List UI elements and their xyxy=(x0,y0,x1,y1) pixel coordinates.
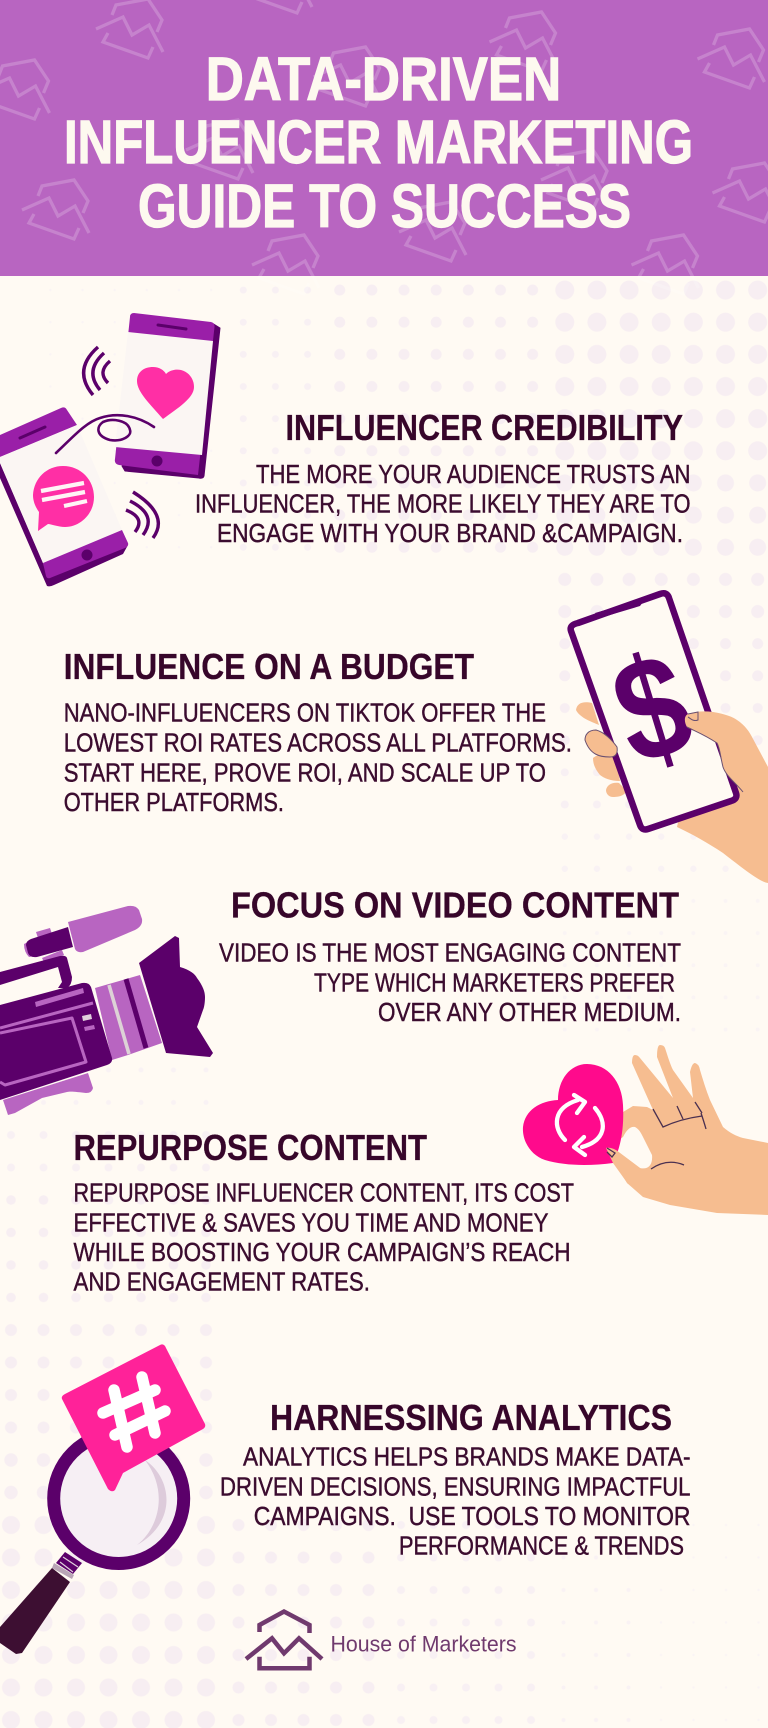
body text: WHILE BOOSTING YOUR CAMPAIGN’S REACH xyxy=(74,1237,570,1267)
heading: FOCUS ON VIDEO CONTENT xyxy=(231,885,679,926)
hashtag xyxy=(103,1377,165,1447)
body text: PERFORMANCE & TRENDS xyxy=(399,1531,684,1561)
icon: hand holding heart with recycle arrows xyxy=(523,1045,768,1215)
body text xyxy=(64,698,572,817)
body text: REPURPOSE INFLUENCER CONTENT, ITS COST xyxy=(74,1178,574,1208)
title: GUIDE TO SUCCESS xyxy=(138,172,631,240)
squiggle xyxy=(56,415,154,453)
handle xyxy=(0,956,72,988)
panel: focus on video content xyxy=(0,885,681,1115)
hand back xyxy=(677,712,768,883)
icon: two phones with heart and chat xyxy=(0,313,220,586)
body text: START HERE, PROVE ROI, AND SCALE UP TO xyxy=(64,757,546,787)
magnifier handle xyxy=(0,1552,82,1654)
body text: OVER ANY OTHER MEDIUM. xyxy=(378,997,681,1027)
panel: influencer credibility xyxy=(0,313,690,586)
body text: DRIVEN DECISIONS, ENSURING IMPACTFUL xyxy=(220,1471,690,1501)
body text: ANALYTICS HELPS BRANDS MAKE DATA- xyxy=(243,1442,690,1472)
phone notch xyxy=(595,598,646,618)
lens barrel xyxy=(95,975,162,1060)
body text: ENGAGE WITH YOUR BRAND &CAMPAIGN. xyxy=(217,518,683,548)
icon: video camera xyxy=(0,906,213,1115)
body text: EFFECTIVE & SAVES YOU TIME AND MONEY xyxy=(74,1207,548,1237)
body text xyxy=(74,1178,574,1297)
dollar sign: $ xyxy=(595,620,709,796)
heading: INFLUENCE ON A BUDGET xyxy=(64,646,474,687)
body text: LOWEST ROI RATES ACROSS ALL PLATFORMS. xyxy=(64,728,572,758)
hand outline xyxy=(687,712,743,792)
left phone xyxy=(0,407,128,586)
heart xyxy=(523,1064,623,1165)
panel: repurpose content xyxy=(74,1045,768,1297)
chat bubble xyxy=(33,466,94,531)
heading: HARNESSING ANALYTICS xyxy=(270,1397,672,1438)
phone xyxy=(571,593,736,830)
signal waves xyxy=(84,347,158,538)
footer logo xyxy=(246,1612,516,1668)
camera body xyxy=(0,983,112,1100)
title xyxy=(64,45,693,240)
palm over phone xyxy=(685,711,768,806)
recycle arrows xyxy=(557,1095,603,1155)
foot xyxy=(3,1073,93,1115)
panel: influence on a budget xyxy=(64,593,768,883)
lens hood xyxy=(139,936,213,1057)
icon: hand holding phone with dollar sign xyxy=(571,593,768,883)
hand xyxy=(610,1045,768,1215)
body text: NANO-INFLUENCERS ON TIKTOK OFFER THE xyxy=(64,698,546,728)
finger lines xyxy=(607,1102,706,1169)
heading: INFLUENCER CREDIBILITY xyxy=(286,407,683,448)
magnifier lens xyxy=(54,1434,184,1564)
body text: CAMPAIGNS. USE TOOLS TO MONITOR xyxy=(254,1501,690,1531)
header banner xyxy=(0,0,768,294)
title: DATA-DRIVEN xyxy=(206,45,561,113)
body text: OTHER PLATFORMS. xyxy=(64,787,284,817)
brand name: House of Marketers xyxy=(330,1632,516,1657)
body text: THE MORE YOUR AUDIENCE TRUSTS AN xyxy=(256,459,690,489)
body text xyxy=(195,459,690,548)
body text xyxy=(220,1442,690,1561)
microphone xyxy=(24,906,142,962)
body text: INFLUENCER, THE MORE LIKELY THEY ARE TO xyxy=(195,489,690,519)
fingers behind phone xyxy=(576,702,626,797)
front finger xyxy=(585,730,617,757)
icon: house logo xyxy=(246,1612,322,1668)
right phone xyxy=(115,313,220,478)
heading: REPURPOSE CONTENT xyxy=(74,1127,427,1168)
body text: VIDEO IS THE MOST ENGAGING CONTENT xyxy=(219,938,681,968)
body text xyxy=(219,938,681,1027)
panel: harnessing analytics xyxy=(0,1344,690,1654)
icon: magnifier with hashtag bubble xyxy=(0,1344,205,1654)
body text: AND ENGAGEMENT RATES. xyxy=(74,1267,370,1297)
heart xyxy=(137,367,194,419)
lens shine xyxy=(137,1460,167,1545)
speech bubble xyxy=(62,1344,205,1491)
body text: TYPE WHICH MARKETERS PREFER xyxy=(314,968,675,998)
thumb tip xyxy=(606,1148,640,1184)
